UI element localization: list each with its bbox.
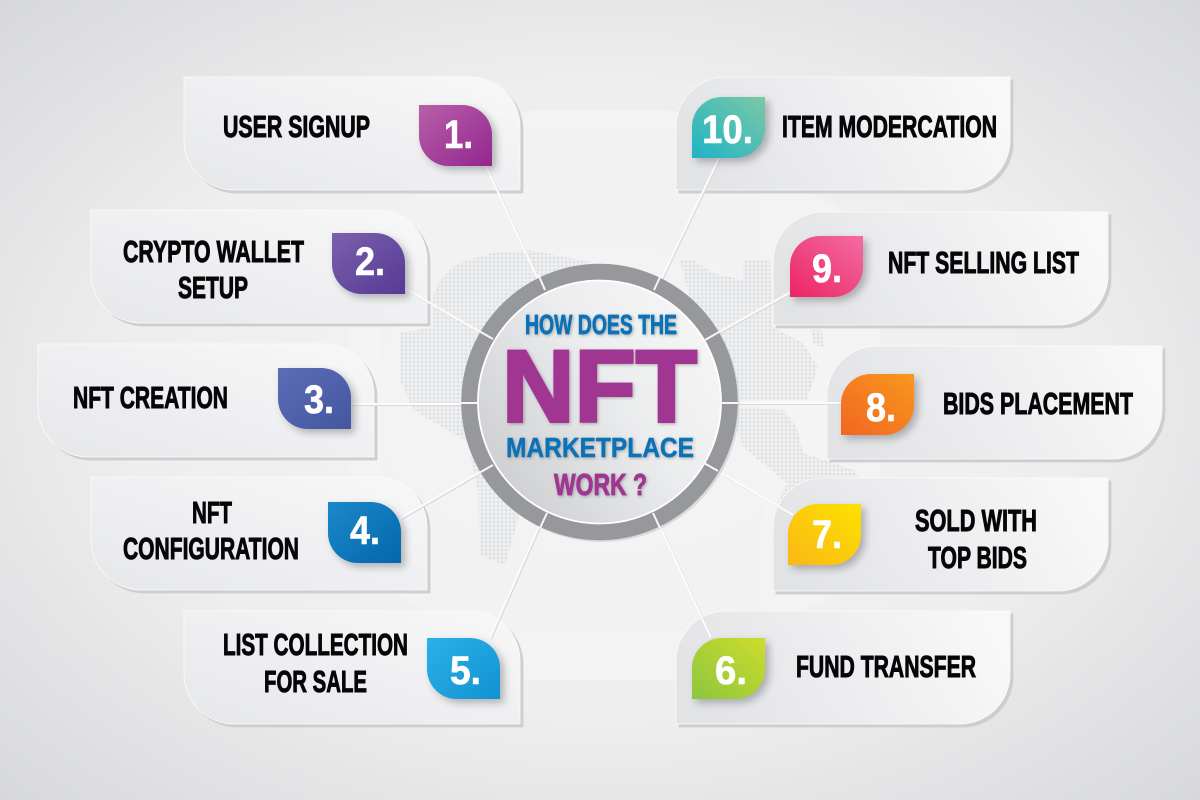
step 4	[123, 495, 401, 566]
title	[502, 309, 697, 502]
step 9 label: NFT SELLING LIST	[888, 245, 1079, 280]
step 3 number: 3.	[304, 378, 334, 422]
step 9	[790, 236, 1079, 297]
step 4 label: CONFIGURATION	[123, 531, 299, 566]
step 7 label: SOLD WITH	[915, 503, 1037, 538]
step 9 badge	[790, 236, 863, 297]
step 1	[223, 105, 492, 166]
step 9 number: 9.	[812, 247, 842, 291]
step 5	[223, 627, 500, 699]
step 2 badge	[332, 233, 405, 294]
step 2 label: CRYPTO WALLET	[123, 234, 304, 269]
step 6 badge	[692, 638, 765, 699]
step 7	[788, 503, 1037, 575]
step 4 number: 4.	[350, 509, 380, 553]
step 5 badge	[427, 638, 500, 699]
panel: step 1 card	[184, 77, 520, 190]
step 10 badge	[692, 97, 765, 158]
background glow shape	[350, 110, 880, 680]
step 2 number: 2.	[355, 240, 385, 284]
step 7 label	[915, 503, 1037, 575]
step 2 label: SETUP	[178, 270, 248, 305]
step 4 label: NFT	[192, 495, 232, 530]
title: WORK ?	[554, 467, 647, 502]
panel: step 7 card	[773, 478, 1108, 591]
step 6 number: 6.	[715, 649, 747, 693]
step 6 label: FUND TRANSFER	[796, 649, 976, 684]
step 7 number: 7.	[812, 513, 842, 557]
title: HOW DOES THE	[525, 309, 677, 340]
step 1 number: 1.	[444, 113, 473, 157]
panel: step 10 card	[676, 77, 1010, 190]
panel: step 5 card	[184, 611, 520, 724]
step 8 badge	[841, 374, 914, 435]
step 1 label: USER SIGNUP	[223, 109, 370, 144]
step 2	[123, 233, 405, 305]
step 10 number: 10.	[702, 108, 753, 152]
panel: step 4 card	[91, 477, 427, 590]
step 5 label	[223, 627, 408, 699]
panel: step 2 card	[91, 210, 427, 323]
step 5 number: 5.	[450, 649, 481, 693]
step 8	[841, 374, 1133, 435]
step 2 label	[123, 234, 304, 305]
step 7 label: TOP BIDS	[928, 540, 1027, 575]
panel: step 6 card	[676, 611, 1010, 724]
step 8 number: 8.	[866, 386, 896, 430]
panel: step 9 card	[773, 212, 1108, 325]
step 10 label: ITEM MODERCATION	[782, 109, 997, 144]
panel: step 8 card	[827, 346, 1162, 459]
step 3	[73, 368, 351, 429]
step 3 label: NFT CREATION	[73, 380, 228, 415]
step 4 label	[123, 495, 299, 566]
step 3 badge	[278, 368, 351, 429]
connector spokes	[351, 158, 841, 638]
step 7 badge	[788, 504, 861, 565]
panel: step 3 card	[38, 344, 374, 457]
step 5 label: FOR SALE	[264, 664, 367, 699]
step 5 label: LIST COLLECTION	[223, 627, 408, 662]
step 4 badge	[328, 502, 401, 563]
step 10	[692, 97, 997, 158]
step 1 badge	[419, 105, 492, 166]
title: MARKETPLACE	[506, 432, 694, 463]
dotted world map	[400, 250, 860, 565]
step 6	[692, 638, 976, 699]
center hub ring and disc	[461, 266, 740, 542]
title: NFT	[502, 330, 697, 444]
